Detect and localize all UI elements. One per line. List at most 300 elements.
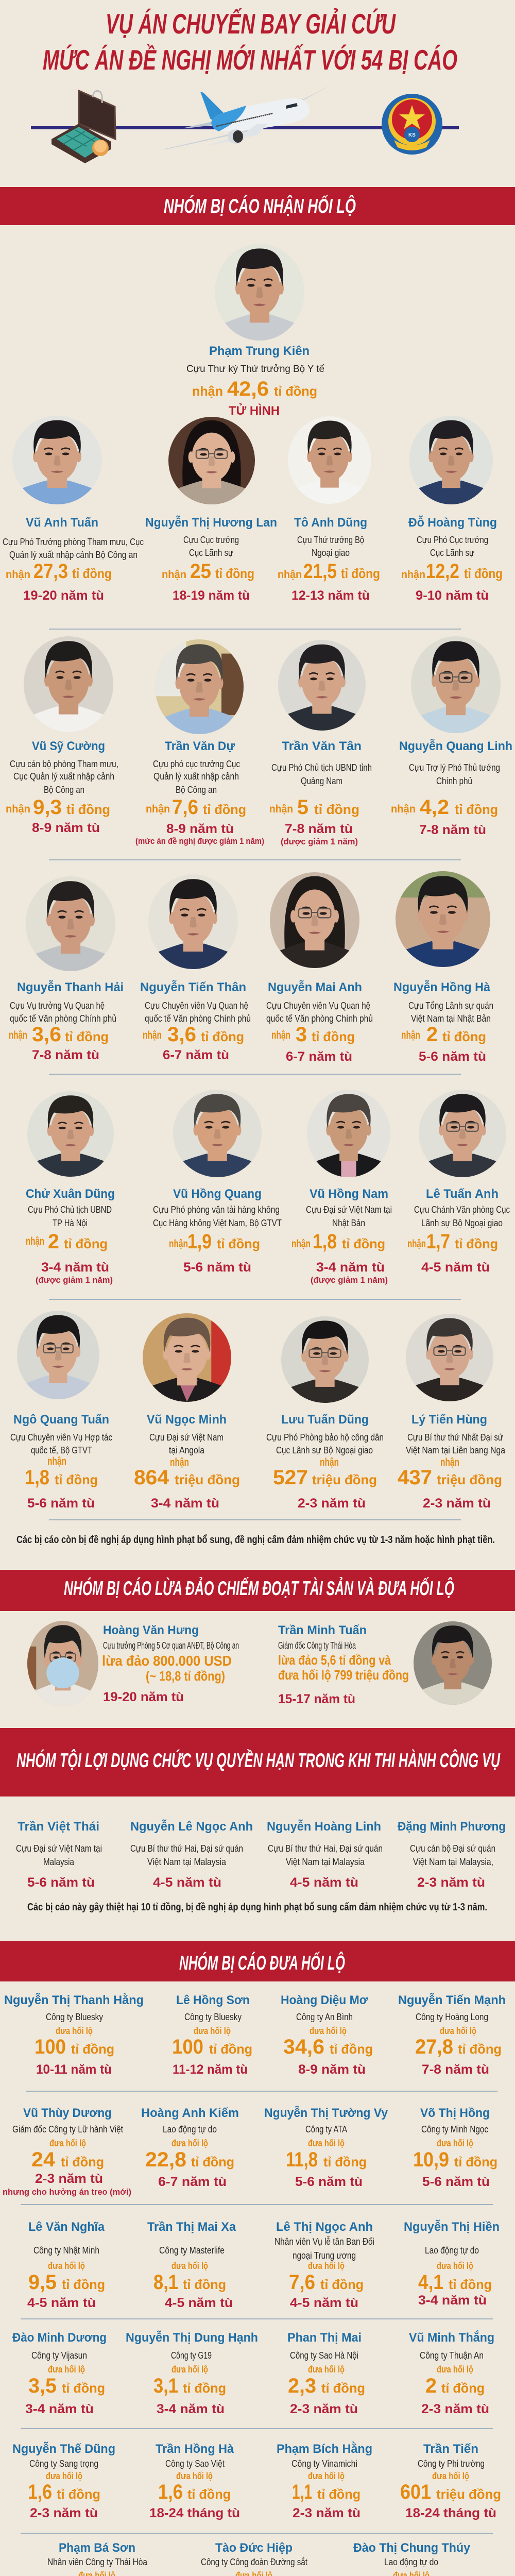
role: Công ty Bluesky [46,2012,103,2022]
sentence: 18-24 tháng tù [149,2506,240,2520]
photo [143,1313,231,1402]
amount: 27,3 [33,560,68,583]
person: Nguyễn Thị Thanh Hằng [4,1993,144,2077]
role: Bộ Công an [176,785,217,795]
person: Nguyễn Tiến Mạnh [398,1993,506,2077]
person: Vũ Hồng Nam [291,1090,392,1285]
name: Nguyễn Thế Dũng [12,2442,115,2456]
role: Cựu Chuyên viên Vụ Quan hệ [145,1001,248,1011]
amount: triệu đồng [312,1472,377,1487]
person: Nguyễn Thị Hiền [404,2219,500,2308]
amount: tỉ đồng [320,2277,364,2292]
amount [407,1230,498,1253]
amount [102,1653,232,1684]
photo [27,1621,98,1706]
person: Nguyễn Thị Tường Vy [264,2106,388,2189]
sentence: 3-4 năm tù [316,1260,385,1275]
name: Tô Anh Dũng [294,516,367,530]
role [10,1001,116,1024]
role: Công ty G19 [171,2350,212,2361]
person: Võ Thị Hồng [413,2106,497,2189]
name: Trần Minh Tuấn [278,1623,367,1637]
amount: đưa hối lộ [171,2261,208,2271]
amount: 1,1 [292,2481,312,2503]
role: Ngoại giao [312,548,350,558]
sentence: 2-3 năm tù [417,1875,485,1890]
amount: 1,7 [426,1230,450,1253]
amount: nhận [440,1456,459,1468]
amount: 7,6 [289,2271,315,2294]
amount: tỉ đồng [449,2277,492,2292]
role: Công ty Minh Ngọc [421,2124,488,2134]
role [274,2236,374,2261]
sentence [311,1260,388,1285]
amount: nhận [391,803,416,815]
person: Hoàng Anh Kiếm [141,2106,239,2189]
role: Cựu Chuyên viên Vụ Quan hệ [266,1001,370,1011]
name: Nguyễn Thị Tường Vy [264,2106,388,2120]
amount: tỉ đồng [455,1236,498,1251]
sentence: 5-6 năm tù [422,2175,490,2189]
name: Nguyễn Thị Thanh Hằng [4,1993,144,2007]
sentence: 2-3 năm tù [421,2402,489,2416]
amount [289,2261,364,2294]
amount: tỉ đồng [187,2486,231,2502]
amount: tỉ đồng [183,2380,226,2396]
photo [12,416,102,504]
amount: tỉ đồng [61,2154,104,2170]
role [417,535,488,558]
amount: 7,6 [172,796,198,819]
amount [26,1230,108,1253]
person: Nguyễn Hồng Hà [393,871,493,1064]
amount [35,2026,114,2058]
person: Đào Thị Chung Thúy [353,2541,471,2576]
amount: tỉ đồng [215,566,254,581]
amount: nhận [407,1238,426,1250]
person: Trần Văn Dự [135,639,264,846]
amount: 9,5 [28,2271,57,2294]
amount: đưa hối lộ [437,2138,473,2148]
name: Nguyễn Hoàng Linh [267,1819,381,1834]
name: Tào Đức Hiệp [215,2541,293,2555]
role: Bộ Công an [44,785,84,795]
amount [25,1455,98,1489]
section band: đưa hối lộ: NHÓM BỊ CÁO ĐƯA HỐI LỘ [179,1951,345,1974]
amount: triệu đồng [436,2486,501,2502]
sentence: 3-4 năm tù [151,1496,219,1511]
amount: 4,1 [418,2271,443,2294]
section band: lợi dụng chức vụ [0,1728,515,1797]
amount: đưa hối lộ [49,2138,86,2148]
amount [278,1652,409,1683]
amount: tỉ đồng [201,1029,244,1044]
role: Cựu Thư ký Thứ trưởng Bộ Y tế [186,364,324,375]
amount: 2 [425,2375,437,2397]
amount: tỉ đồng [312,1029,355,1044]
amount [415,2026,502,2058]
amount [425,2364,485,2397]
role: Cục Quản lý xuất nhập cảnh [13,771,114,782]
sentence: 18-19 năm tù [173,588,250,603]
photo [411,636,501,733]
amount: tỉ đồng [62,2380,105,2396]
amount: đưa hối lộ [48,2364,85,2375]
role: Công ty Vijasun [31,2350,87,2361]
name: Nguyễn Lê Ngọc Anh [130,1819,253,1834]
name: Vũ Sỹ Cường [32,739,105,753]
person: Nguyễn Tiến Thân [140,874,251,1062]
person: Lê Tuấn Anh [407,1090,510,1275]
amount: 11,8 [286,2148,318,2171]
sentence: 3-4 năm tù [25,2402,94,2416]
role: Lao động tự do [384,2557,438,2567]
amount: tỉ đồng [217,1236,260,1251]
amount: đưa hối lộ [310,2026,347,2036]
role [183,535,239,558]
sentence: 4-5 năm tù [165,2296,233,2310]
amount: 3,5 [28,2375,57,2397]
role: Cựu cán bộ phòng Tham mưu, [10,759,118,769]
amount [153,2261,226,2294]
amount [398,1456,502,1489]
photo [173,1090,262,1177]
name: Vũ Anh Tuấn [26,516,98,530]
name: Hoàng Anh Kiếm [141,2106,239,2120]
person: Hoàng Văn Hưng [27,1621,239,1706]
photo [27,1091,114,1177]
name: Trần Việt Thái [18,1820,99,1834]
role: Nhân viên Vụ lễ tân Ban Đối [274,2236,374,2247]
sentence: 4-5 năm tù [290,2296,358,2310]
amount: 10,9 [413,2148,449,2171]
person: Hoàng Diệu Mơ [281,1993,373,2077]
person: Lưu Tuấn Dũng [266,1316,384,1511]
amount: nhận [401,569,425,581]
icon: prosecution emblem [382,94,442,155]
amount: tỉ đồng [342,1236,385,1251]
amount: 5 [297,796,308,819]
name: Phan Thị Mai [287,2331,362,2345]
amount: tỉ đồng [191,2154,234,2170]
photo [406,1314,493,1401]
role: Cựu Cục trưởng [183,535,239,545]
amount: 24 [31,2148,56,2171]
role: Cựu Đại sứ Việt Nam tại [16,1843,102,1854]
amount: tỉ đồng [458,2041,502,2057]
sentence: 12-13 năm tù [291,588,370,603]
section band: nhận hối lộ: NHÓM BỊ CÁO NHẬN HỐI LỘ [164,194,356,217]
photo [270,872,359,968]
amount: 2 [426,1023,438,1046]
amount: 22,8 [145,2148,186,2171]
amount: 601 [400,2481,431,2503]
amount: nhận [143,1029,162,1041]
role [16,1843,102,1867]
photo [168,417,255,504]
role [266,1001,373,1024]
amount: 21,5 [303,560,337,583]
name: Lê Thị Ngọc Anh [276,2220,373,2234]
amount: đưa hối lộ [171,2138,208,2148]
person: Nguyễn Lê Ngọc Anh [130,1819,253,1890]
amount: 527 [273,1466,308,1489]
role [10,759,118,795]
amount: nhận [6,569,30,581]
amount [192,378,317,400]
amount: đưa hối lộ [437,2261,473,2271]
role: Cựu Đại sứ Việt Nam tại [306,1205,392,1215]
sentence: 2-3 năm tù [35,2172,103,2186]
amount [162,560,254,583]
amount: đưa hối lộ [56,2026,93,2036]
role: Chính phủ [436,776,472,786]
amount: 42,6 [227,378,269,400]
sentence: 7-8 năm tù [422,2062,489,2077]
amount: lừa đảo 800.000 USD [102,1653,232,1669]
amount [291,1230,385,1253]
role: Lao động tự do [425,2245,479,2256]
title line [31,126,459,129]
amount [418,2261,492,2294]
amount [28,2364,105,2397]
amount [169,1230,260,1253]
name: Vũ Ngọc Minh [147,1413,227,1427]
amount: tỉ đồng [464,566,503,581]
amount: nhận [9,1029,27,1041]
amount [401,560,503,583]
amount: nhận [271,1029,290,1041]
photo [17,1311,99,1399]
sentence [135,822,264,846]
role [410,1843,495,1867]
amount [273,1456,377,1489]
role [10,1432,112,1455]
amount: 3,6 [167,1023,196,1046]
name: Vũ Minh Thắng [409,2330,494,2345]
title [43,8,457,76]
role: Việt Nam tại Malaysia [286,1857,365,1867]
sentence: 4-5 năm tù [153,1875,221,1890]
role: Công ty Sao Việt [165,2459,225,2469]
sentence: 5-6 năm tù [419,1049,486,1064]
amount: nhận [291,1238,311,1250]
person: Vũ Sỹ Cường [6,636,118,835]
amount [6,796,110,819]
sentence: (được giảm 1 năm) [281,837,358,846]
name: Trần Văn Tân [282,739,362,753]
amount: 864 [134,1466,169,1489]
amount: 2,3 [288,2375,316,2397]
amount [286,2138,367,2171]
amount [9,1023,109,1046]
sentence: (được giảm 1 năm) [311,1275,388,1285]
person: Phan Thị Mai [287,2331,365,2416]
icon: briefcase with money [52,91,115,163]
sentence [36,1260,113,1285]
role: Công ty Sao Hà Nội [290,2350,358,2361]
role: Việt Nam tại Malaysia [147,1857,227,1867]
role: Cựu Thứ trưởng Bộ [297,535,364,545]
person: Phạm Bích Hằng [277,2442,372,2520]
amount: tỉ đồng [64,1236,108,1251]
amount: tỉ đồng [321,2380,365,2396]
sentence: 3-4 năm tù [418,2293,487,2308]
person: Ngô Quang Tuấn [10,1311,112,1511]
sentence: 3-4 năm tù [41,1260,109,1275]
photo [24,636,113,732]
person: Trần Minh Tuấn [278,1621,492,1706]
amount: tỉ đồng [66,802,110,817]
amount: đưa hối lộ [308,2261,345,2271]
sentence: 2-3 năm tù [298,1496,366,1511]
amount [6,560,112,583]
sentence: 4-5 năm tù [421,1260,490,1275]
role: Cựu phó cục trưởng Cục [153,759,240,769]
amount: nhận [320,1456,339,1468]
sentence: 5-6 năm tù [27,1875,95,1890]
role [266,1432,384,1455]
person: Vũ Minh Thắng [409,2330,494,2416]
amount: đưa hối lộ [194,2026,231,2036]
amount: 100 [172,2036,203,2058]
role: Cựu Bí thư thứ Hai, Đại sứ quán [130,1843,243,1854]
role: Cựu Phó Trưởng phòng Tham mưu, Cục [3,537,144,547]
amount: 12,2 [426,560,459,583]
amount: tỉ đồng [203,802,246,817]
person: Phạm Bá Sơn [32,2541,161,2576]
person: Đỗ Hoàng Tùng [401,416,503,603]
role: Công ty Phi trường [418,2459,485,2469]
role: TP Hà Nội [53,1218,88,1228]
person: Nguyễn Quang Linh [391,636,512,837]
person: Lý Tiến Hùng [398,1314,506,1511]
photo [281,1316,369,1403]
role: Việt Nam tại Malaysia, [413,1857,493,1867]
amount: đưa hối lộ [308,2471,345,2481]
amount: tỉ đồng [209,2041,252,2057]
role [28,1205,112,1228]
role [409,762,500,786]
amount: tỉ đồng [442,1029,486,1044]
amount: đưa hối lộ [308,2364,345,2375]
sentence: 7-8 năm tù [419,823,486,837]
sentence: 2-3 năm tù [423,1496,491,1511]
role: tại Angola [169,1445,205,1455]
amount: đưa hối lộ [437,2364,473,2375]
amount: đưa hối lộ [46,2471,82,2481]
amount: 437 [398,1466,432,1489]
photo [419,1090,506,1177]
amount: đưa hối lộ [176,2471,213,2481]
person: Tô Anh Dũng [278,416,380,603]
sentence: 15-17 năm tù [278,1692,355,1706]
amount: tỉ đồng [317,2486,360,2502]
photo [26,876,115,971]
name: Đào Thị Chung Thúy [353,2541,471,2555]
role: Công ty Hoàng Long [416,2012,488,2022]
role: Quảng Nam [301,776,342,786]
icon: airplane [163,84,333,149]
amount: nhận [6,803,30,815]
role: quốc tế Văn phòng Chính phủ [266,1013,373,1024]
sentence: 3-4 năm tù [157,2402,225,2416]
photo [155,639,244,734]
amount [143,1023,244,1046]
person: Vũ Hồng Quang [153,1090,282,1275]
role: Công ty An Bình [296,2012,353,2022]
amount [413,2138,497,2171]
name: Lê Văn Nghĩa [28,2220,105,2234]
role: Công ty ATA [305,2124,347,2134]
name: Đào Minh Dương [12,2331,107,2345]
amount: tỉ đồng [441,2380,485,2396]
amount: tỉ đồng [62,2277,105,2292]
sentence [3,2172,131,2197]
sentence: 10-11 năm tù [36,2062,112,2077]
role: quốc tế Văn phòng Chính phủ [145,1013,251,1024]
photo [414,1621,492,1705]
role: Cựu Phó Phòng bảo hộ công dân [266,1432,384,1443]
amount: đưa hối lộ [308,2138,345,2148]
person: Lê Văn Nghĩa [27,2220,105,2310]
name: Hoàng Văn Hưng [103,1623,199,1637]
amount: tỉ đồng [454,2154,497,2170]
role: Việt Nam tại Nhật Bản [411,1013,491,1024]
amount: 8,1 [153,2271,178,2294]
person: Nguyễn Mai Anh [266,872,373,1064]
role [149,1432,224,1455]
section band: đưa hối lộ [0,1941,515,1981]
sentence: 8-9 năm tù [298,2062,366,2077]
role: Lao động tự do [163,2124,217,2134]
amount: tỉ đồng [314,802,359,817]
name: Đỗ Hoàng Tùng [408,515,497,530]
person: Trần Tiến [400,2442,501,2520]
sentence: 11-12 năm tù [173,2062,248,2077]
role: Quản lý xuất nhập cảnh [153,771,239,782]
name: Phạm Trung Kiên [209,344,310,358]
name: Phạm Bích Hằng [277,2442,372,2456]
name: Hoàng Diệu Mơ [281,1993,368,2007]
amount: tỉ đồng [65,1029,109,1044]
amount: đưa hối lộ 799 triệu đồng [278,1667,409,1683]
role [153,1205,282,1228]
sentence [281,822,358,846]
amount: 2 [48,1230,59,1253]
role: Công ty Masterlife [159,2245,225,2256]
amount: (~ 18,8 tỉ đồng) [146,1668,225,1684]
sentence: TỬ HÌNH [229,403,280,418]
role: Cục Lãnh sự Bộ Ngoại giao [276,1445,373,1455]
role: Quản lý xuất nhập cảnh Bộ Công an [9,550,138,560]
amount: tỉ đồng [183,2277,226,2292]
role: Nhân viên Công ty Thái Hòa [47,2557,148,2567]
role: Công ty Vinamichi [291,2459,357,2469]
person: Nguyễn Thế Dũng [12,2442,115,2520]
amount: 9,3 [33,796,62,819]
amount [31,2138,104,2171]
amount [153,2364,226,2397]
name: Nguyễn Hồng Hà [393,980,491,994]
role: Công ty Bluesky [184,2012,242,2022]
sentence: 7-8 năm tù [32,1048,99,1062]
person: Vũ Thùy Dương [3,2106,131,2197]
sentence: 18-24 tháng tù [405,2506,496,2520]
amount: tỉ đồng [323,2154,367,2170]
role: Cựu Phó Chủ tịch UBND tỉnh [271,762,372,773]
amount: đưa hối lộ [432,2471,469,2481]
